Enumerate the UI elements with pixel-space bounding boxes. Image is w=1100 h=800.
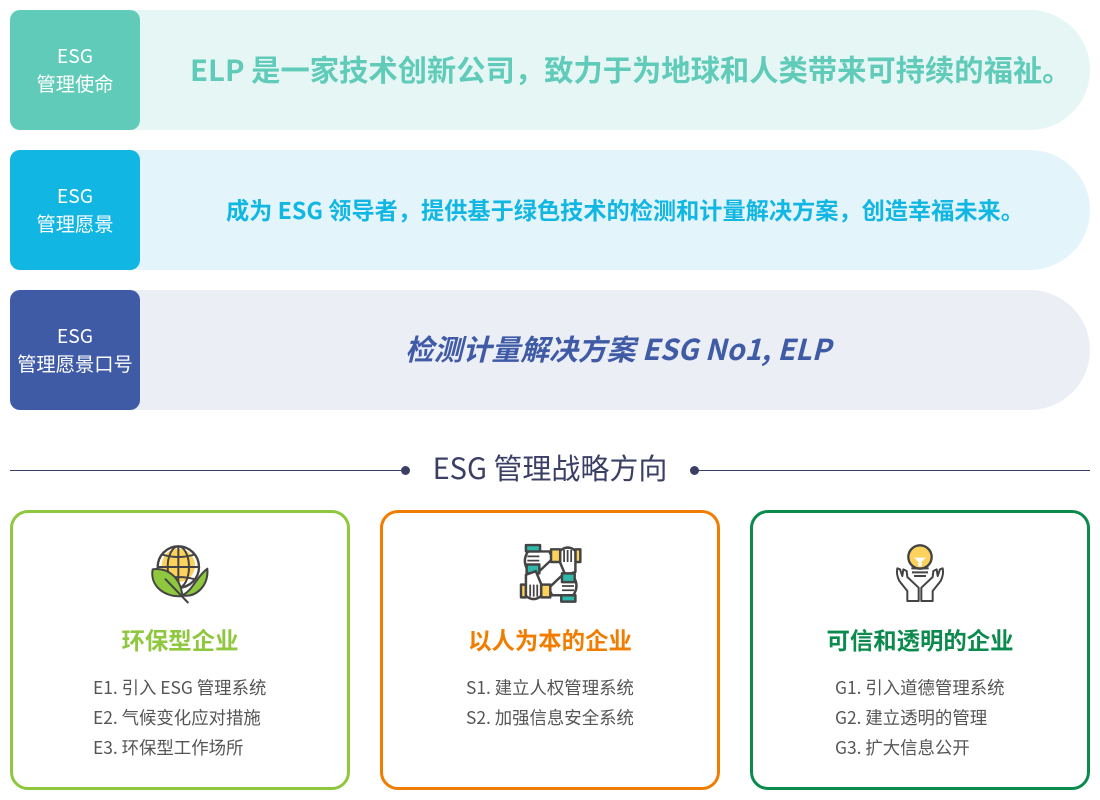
label: ESG vision — [10, 150, 140, 270]
panel: trust card: G1. 引入道德管理系统 — [835, 675, 1004, 700]
mission statement: ELP 是一家技术创新公司，致力于为地球和人类带来可持续的福祉。 — [190, 48, 1071, 90]
panel: people card: S1. 建立人权管理系统 — [466, 675, 634, 700]
card title: 可信和透明的企业 — [826, 622, 1014, 656]
panel: ESG mission band — [10, 10, 1090, 130]
icon: joined hands — [520, 544, 582, 603]
item list — [93, 675, 266, 760]
label: ESG vision slogan: ESG — [57, 321, 93, 349]
panel: ESG vision slogan band — [10, 290, 1090, 410]
icon: globe and leaf — [151, 545, 208, 604]
panel: environment card — [10, 510, 350, 790]
vision statement: 成为 ESG 领导者，提供基于绿色技术的检测和计量解决方案，创造幸福未来。 — [226, 192, 1024, 226]
label: ESG vision slogan — [10, 290, 140, 410]
heading text: ESG 管理战略方向 — [433, 446, 667, 488]
label: ESG mission: ESG — [57, 41, 93, 69]
panel: environment card: E1. 引入 ESG 管理系统 — [93, 675, 266, 700]
panel: environment card: E2. 气候变化应对措施 — [93, 705, 261, 730]
panel: trust card: G2. 建立透明的管理 — [835, 705, 987, 730]
card title: 以人为本的企业 — [468, 622, 632, 656]
panel: people card: S2. 加强信息安全系统 — [466, 705, 634, 730]
slogan statement: 检测计量解决方案 ESG No1, ELP — [405, 328, 831, 369]
icon: light bulb and hands — [896, 544, 944, 602]
item list — [466, 675, 634, 730]
panel: trust card: G3. 扩大信息公开 — [835, 735, 970, 760]
label: ESG vision slogan: 管理愿景口号 — [17, 349, 133, 377]
panel: trust card — [750, 510, 1090, 790]
item list — [835, 675, 1004, 760]
panel: environment card: E3. 环保型工作场所 — [93, 735, 243, 760]
label: ESG vision: ESG — [57, 181, 93, 209]
label: ESG mission: 管理使命 — [36, 69, 114, 97]
label: ESG mission — [10, 10, 140, 130]
card title: 环保型企业 — [122, 622, 238, 656]
panel: people card — [380, 510, 720, 790]
panel: ESG vision band — [10, 150, 1090, 270]
section heading with rules — [10, 446, 1090, 488]
label: ESG vision: 管理愿景 — [36, 209, 114, 237]
